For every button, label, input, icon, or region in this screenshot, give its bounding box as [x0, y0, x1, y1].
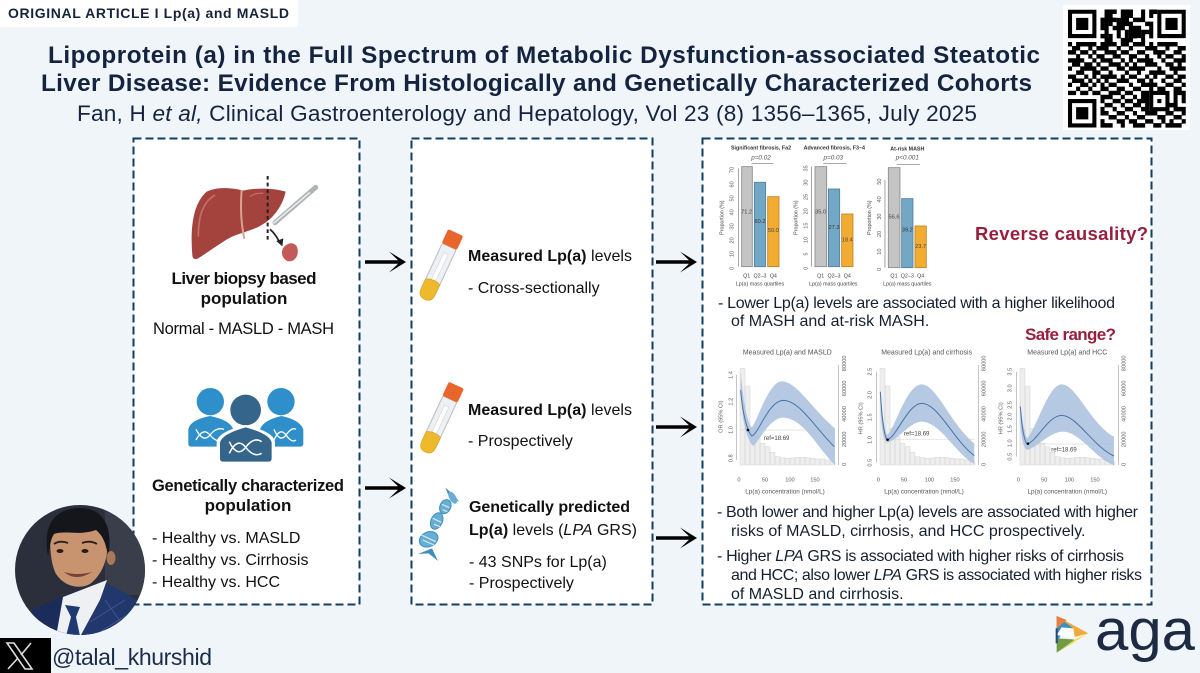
- line chart: HCC: 2.0: [1008, 413, 1014, 421]
- bar chart: advanced fibrosis: 20: [803, 208, 809, 214]
- bar chart: at-risk MASH: 56.6: [888, 214, 899, 220]
- line chart: HCC: 3.5: [1008, 368, 1014, 376]
- bar chart: significant fibrosis: 50.0: [768, 228, 779, 234]
- text: genetic groups: - Healthy vs. HCC: [152, 574, 280, 591]
- line chart: HCC: 40000: [1122, 406, 1128, 422]
- callout: safe range: Safe range?: [1025, 325, 1116, 344]
- bar chart: significant fibrosis: 50: [729, 195, 735, 201]
- line chart: HCC: 50: [1041, 477, 1047, 483]
- icon: DNA helix: [417, 488, 459, 561]
- text: genetic groups: - Healthy vs. MASLD: [152, 530, 300, 547]
- bar chart: at-risk MASH: 10: [877, 249, 883, 255]
- bar chart: significant fibrosis: 40: [729, 209, 735, 215]
- bar chart: at-risk MASH: Q2–3: [901, 274, 914, 280]
- arrow: biopsy to measured: [365, 252, 406, 272]
- bar chart: at-risk MASH: 39.2: [902, 228, 913, 234]
- bar chart: significant fibrosis: [719, 145, 791, 287]
- bar chart: advanced fibrosis: Advanced fibrosis, F3–4: [804, 145, 865, 151]
- line chart: cirrhosis: 2.0: [868, 391, 874, 399]
- line chart: HCC: 1.0: [1008, 439, 1014, 447]
- line chart: HCC: 80000: [1122, 355, 1128, 371]
- line chart: cirrhosis: 100: [925, 477, 934, 483]
- line chart: MASLD: 1.2: [728, 398, 734, 406]
- text: prospective findings: risks of MASLD, cirrhosis, and HCC prospectively.: [731, 523, 1085, 540]
- arrow: cross-sectional to results: [656, 252, 697, 272]
- heading: genetically characterized population: population: [205, 496, 291, 515]
- line chart: MASLD: 1.0: [728, 426, 734, 434]
- line chart: HCC: 1.5: [1008, 425, 1014, 433]
- title: Fan, H et al, Clinical Gastroenterology and Hepatology, Vol 23 (8) 1356–1365, July 2025: [77, 101, 977, 126]
- bar chart: advanced fibrosis: [793, 145, 865, 287]
- text: lower Lp(a) finding: [718, 295, 1115, 330]
- bar chart: advanced fibrosis: 5: [803, 252, 809, 256]
- bar chart: at-risk MASH: At-risk MASH: [890, 146, 924, 152]
- bar chart: advanced fibrosis: 27.3: [828, 225, 839, 231]
- heading: liver biopsy population: population: [201, 289, 287, 308]
- bar chart: advanced fibrosis: p=0.03: [823, 155, 844, 162]
- bar chart: at-risk MASH: 20: [877, 231, 883, 237]
- text: lower Lp(a) finding: of MASH and at-risk MASH.: [731, 313, 929, 330]
- text: genetically predicted: [469, 499, 637, 592]
- line chart: HCC: 0.5: [1008, 453, 1014, 461]
- bar chart: significant fibrosis: Proportion (%): [719, 200, 725, 235]
- callout: reverse causality: Reverse causality?: [975, 223, 1148, 244]
- bar chart: advanced fibrosis: 18.4: [842, 237, 853, 243]
- line chart: cirrhosis: 0.5: [868, 459, 874, 467]
- line chart: MASLD: 40000: [842, 406, 848, 422]
- icon: people with DNA: [188, 388, 303, 463]
- bar chart: at-risk MASH: 0: [877, 268, 883, 271]
- text: genetically predicted: Lp(a) levels (LPA GRS): [469, 522, 637, 539]
- bar chart: at-risk MASH: 30: [877, 214, 883, 220]
- bar chart: at-risk MASH: [867, 146, 932, 287]
- article tag: [0, 0, 298, 27]
- line chart: MASLD: 150: [810, 477, 820, 483]
- line chart: cirrhosis: 60000: [982, 380, 988, 396]
- bar chart: advanced fibrosis: 30: [803, 180, 809, 186]
- bar chart: at-risk MASH: 40: [877, 196, 883, 202]
- bar chart: advanced fibrosis: 35: [803, 165, 809, 171]
- line chart: MASLD: 60000: [842, 380, 848, 396]
- bar chart: at-risk MASH: Lp(a) mass quartiles: [883, 281, 932, 287]
- arrow: prospective to results: [656, 416, 697, 438]
- heading: liver biopsy population: [172, 269, 316, 308]
- bar chart: advanced fibrosis: Q1: [817, 274, 824, 280]
- icon: X logo: [0, 638, 51, 673]
- line chart: HCC: 150: [1090, 477, 1100, 483]
- text: measured cross-sectionally: [468, 248, 632, 297]
- line chart: MASLD: 0.8: [728, 454, 734, 462]
- line chart: HCC: 60000: [1122, 380, 1128, 396]
- line chart: MASLD: 20000: [842, 431, 848, 447]
- line chart: HCC: Lp(a) concentration (nmol/L): [1028, 489, 1107, 496]
- line chart: cirrhosis: 0: [877, 477, 880, 483]
- text: genetically predicted: - Prospectively: [469, 575, 574, 592]
- line chart: MASLD: ref=18.69: [764, 436, 790, 442]
- text: prospective findings: [717, 504, 1142, 603]
- line chart: cirrhosis: Lp(a) concentration (nmol/L): [884, 489, 964, 496]
- line chart: MASLD: 100: [785, 477, 795, 483]
- QR code: [1063, 5, 1190, 130]
- panel: results: [702, 138, 1152, 604]
- text: prospective findings: - Both lower and higher Lp(a) levels are associated with higher: [717, 504, 1139, 521]
- panel: exposure: [412, 138, 652, 604]
- text: genetic groups: [152, 530, 308, 591]
- author photo: [15, 505, 145, 640]
- line chart: HCC: 100: [1065, 477, 1074, 483]
- line chart: HCC: HR (95% CI): [999, 402, 1005, 434]
- line chart: cirrhosis: 50: [901, 477, 907, 483]
- text: measured cross-sectionally: Measured Lp(a) levels: [468, 248, 632, 265]
- arrow: genetic to exposure: [365, 478, 406, 498]
- bar charts: [719, 145, 932, 287]
- line chart: HCC: 20000: [1122, 431, 1128, 447]
- line chart: cirrhosis: Measured Lp(a) and cirrhosis: [881, 350, 973, 357]
- bar chart: at-risk MASH: 23.7: [915, 244, 926, 250]
- text: prospective findings: - Higher LPA GRS is associated with higher risks of cirrhosis: [717, 548, 1124, 565]
- bar chart: significant fibrosis: 10: [729, 251, 735, 257]
- bar chart: advanced fibrosis: Q4: [844, 274, 851, 280]
- line chart: cirrhosis: 2.5: [868, 368, 874, 376]
- line chart: MASLD: 0: [842, 463, 848, 466]
- line chart: cirrhosis: 80000: [982, 355, 988, 371]
- bar chart: advanced fibrosis: 0: [803, 267, 809, 270]
- icon: test tube 1: [417, 229, 463, 303]
- text: prospective findings: of MASLD and cirrhosis.: [731, 586, 904, 603]
- bar chart: significant fibrosis: Lp(a) mass quartiles: [736, 281, 784, 287]
- bar chart: significant fibrosis: Q2–3: [753, 274, 767, 280]
- line chart: HCC: ref=18.69: [1051, 447, 1077, 453]
- text: biopsy groups: Normal - MASLD - MASH: [153, 320, 334, 338]
- bar chart: significant fibrosis: 60.2: [754, 219, 766, 225]
- line chart: cirrhosis: 1.5: [868, 413, 874, 421]
- line chart: MASLD: 1.4: [728, 371, 734, 379]
- title: [41, 42, 1040, 126]
- bar chart: at-risk MASH: Q4: [917, 274, 924, 280]
- line chart: cirrhosis: ref=18.69: [904, 431, 930, 437]
- bar chart: significant fibrosis: Q1: [743, 274, 750, 280]
- bar chart: advanced fibrosis: 35.0: [815, 210, 826, 216]
- arrow: genetic score to results: [656, 528, 697, 548]
- panel: study populations: [134, 138, 360, 604]
- text: measured prospectively: Measured Lp(a) levels: [468, 402, 632, 419]
- bar chart: significant fibrosis: 0: [729, 267, 735, 270]
- title: Liver Disease: Evidence From Histologically and Genetically Characterized Cohorts: [41, 70, 1032, 97]
- text: measured prospectively: [468, 402, 632, 450]
- line chart: MASLD: 0: [737, 477, 741, 483]
- bar chart: advanced fibrosis: 25: [803, 194, 809, 200]
- title: Lipoprotein (a) in the Full Spectrum of Metabolic Dysfunction-associated Steatotic: [48, 42, 1040, 69]
- spline charts: [719, 350, 1128, 496]
- bar chart: advanced fibrosis: 10: [803, 237, 809, 243]
- text: measured cross-sectionally: - Cross-sectionally: [468, 280, 600, 297]
- line chart: HCC: 2.5: [1008, 401, 1014, 409]
- icon: test tube 2: [418, 382, 464, 456]
- line chart: MASLD: Lp(a) concentration (nmol/L): [745, 489, 825, 496]
- bar chart: at-risk MASH: Q1: [890, 274, 898, 280]
- bar chart: significant fibrosis: 71.2: [741, 210, 752, 216]
- text: prospective findings: and HCC; also lower LPA GRS is associated with higher risks: [731, 567, 1142, 584]
- article tag: ORIGINAL ARTICLE I Lp(a) and MASLD: [8, 5, 289, 21]
- bar chart: advanced fibrosis: Q2–3: [827, 274, 841, 280]
- line chart: MASLD: 80000: [842, 355, 848, 371]
- line chart: cirrhosis: 150: [950, 477, 960, 483]
- line chart: MASLD: Measured Lp(a) and MASLD: [743, 350, 832, 357]
- line chart: MASLD: OR (95% CI): [719, 400, 725, 433]
- icon: liver biopsy: [192, 176, 316, 261]
- line chart: HCC: 3.0: [1008, 384, 1014, 392]
- bar chart: significant fibrosis: Significant fibrosis, Fa2: [731, 145, 791, 151]
- bar chart: at-risk MASH: p<0.001: [895, 155, 919, 162]
- line chart: cirrhosis: [859, 350, 988, 496]
- text: genetically predicted: - 43 SNPs for Lp(a): [469, 554, 607, 571]
- bar chart: significant fibrosis: 70: [729, 167, 735, 173]
- bar chart: advanced fibrosis: Lp(a) mass quartiles: [809, 281, 858, 287]
- bar chart: significant fibrosis: Q4: [770, 274, 777, 280]
- bar chart: significant fibrosis: 20: [729, 237, 735, 243]
- line chart: cirrhosis: 20000: [982, 431, 988, 447]
- bar chart: advanced fibrosis: Proportion (%): [793, 200, 799, 235]
- bar chart: at-risk MASH: Proportion (%): [867, 200, 873, 235]
- text: author handle: @talal_khurshid: [52, 644, 212, 670]
- bar chart: significant fibrosis: p=0.02: [750, 155, 771, 162]
- line chart: MASLD: 50: [762, 477, 768, 483]
- line chart: HCC: 0: [1122, 463, 1128, 466]
- heading: genetically characterized population: Genetically characterized: [152, 477, 344, 495]
- logo: AGA: aga: [1095, 598, 1196, 663]
- text: genetic groups: - Healthy vs. Cirrhosis: [152, 552, 308, 569]
- logo: AGA: [1057, 598, 1196, 663]
- line chart: cirrhosis: 0: [982, 463, 988, 466]
- line chart: cirrhosis: HR (95% CI): [859, 402, 865, 434]
- bar chart: significant fibrosis: 60: [729, 181, 735, 187]
- heading: liver biopsy population: Liver biopsy based: [172, 269, 316, 288]
- bar chart: significant fibrosis: 30: [729, 223, 735, 229]
- line chart: cirrhosis: 1.0: [868, 436, 874, 444]
- line chart: HCC: [999, 350, 1128, 496]
- heading: genetically characterized population: [152, 477, 344, 515]
- line chart: HCC: 0: [1017, 477, 1020, 483]
- text: genetically predicted: Genetically predicted: [469, 499, 630, 516]
- text: measured prospectively: - Prospectively: [468, 433, 573, 450]
- line chart: MASLD: [719, 350, 848, 496]
- line chart: HCC: Measured Lp(a) and HCC: [1027, 350, 1107, 357]
- line chart: cirrhosis: 40000: [982, 406, 988, 422]
- bar chart: advanced fibrosis: 15: [803, 223, 809, 229]
- text: lower Lp(a) finding: - Lower Lp(a) levels are associated with a higher likelihood: [718, 295, 1115, 312]
- bar chart: at-risk MASH: 50: [877, 179, 883, 185]
